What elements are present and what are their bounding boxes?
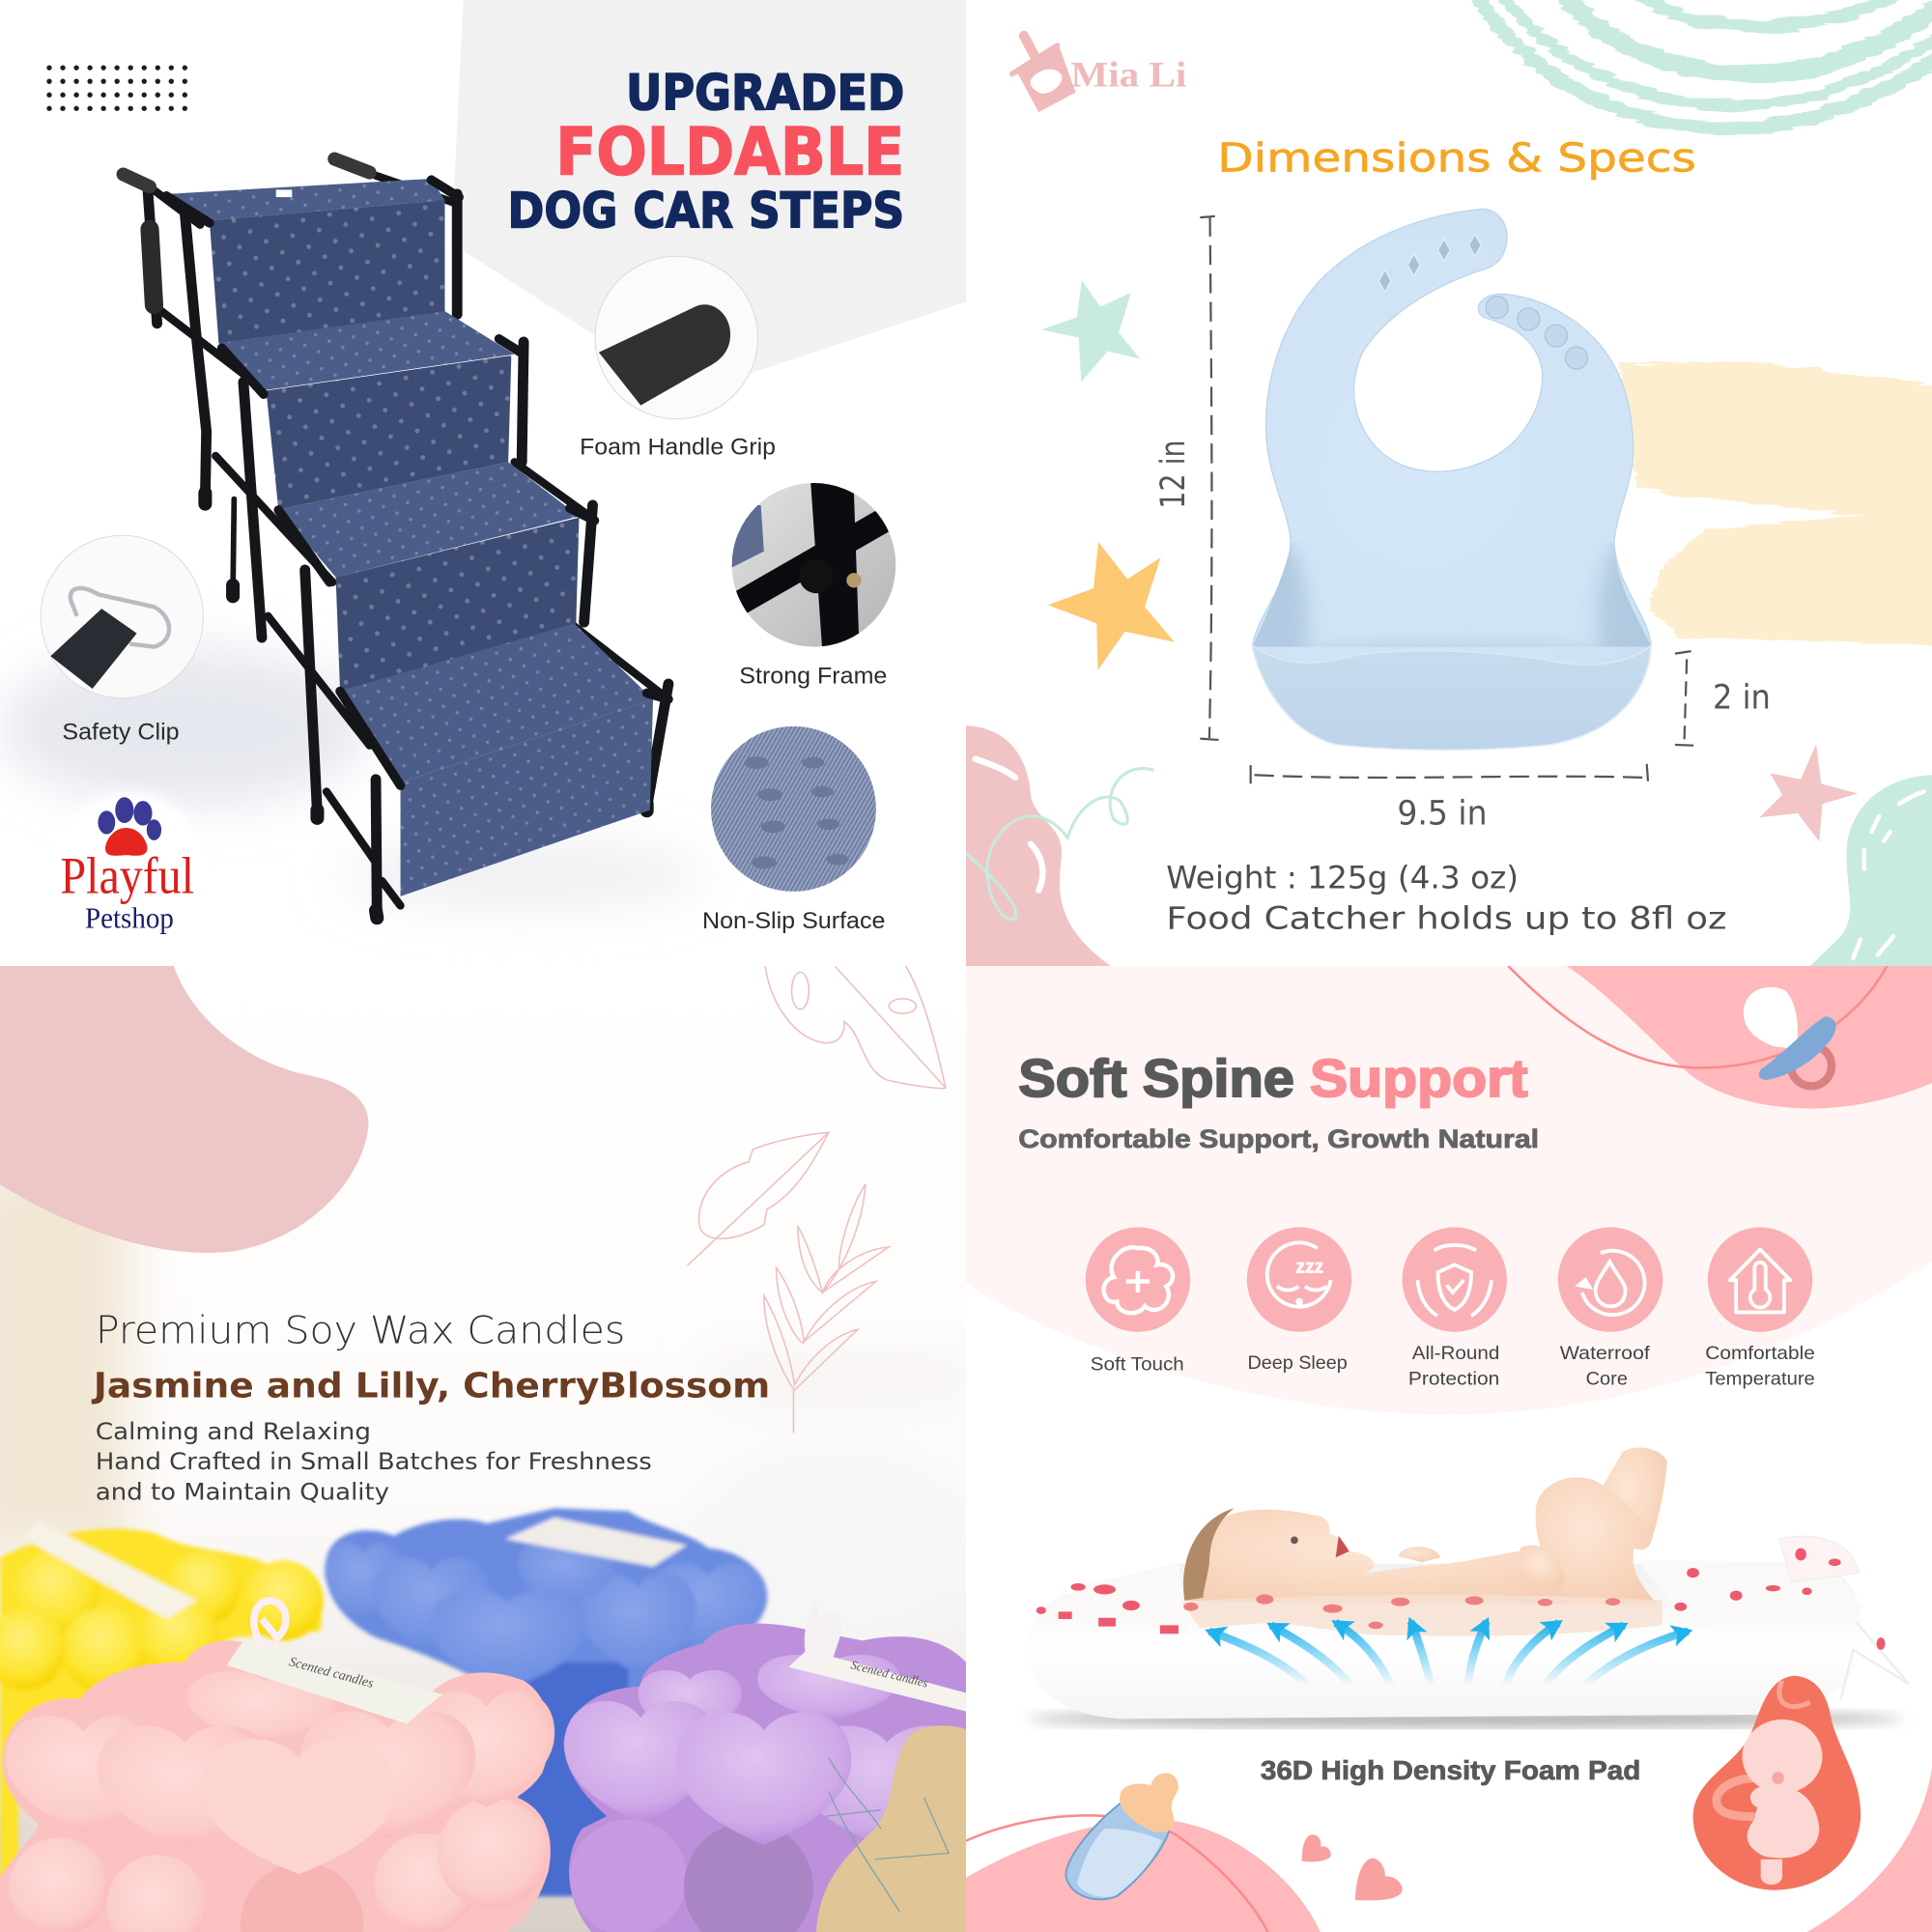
star: mint (1041, 280, 1140, 382)
title: FOLDABLE (555, 113, 904, 189)
panel: dog car steps (0, 0, 966, 934)
description text: Hand Crafted in Small Batches for Freshness (96, 1448, 652, 1475)
pink corner bottom right (1807, 1767, 1932, 1932)
floor shadow (0, 647, 708, 906)
curved line (1508, 966, 1887, 1067)
callout: non-slip surface (702, 726, 885, 934)
feature: all-round protection: All-Round (1412, 1344, 1499, 1364)
baby (1184, 1447, 1667, 1605)
dimension labels: 12 in (1154, 440, 1193, 509)
icon: baby bottle (1065, 1773, 1179, 1899)
blurred background tones (0, 1169, 985, 1656)
title: UPGRADED (626, 66, 904, 123)
candle: pink: Scented candles (287, 1654, 376, 1691)
cream brush stroke (1619, 362, 1932, 643)
sheer fabric (1181, 1595, 1662, 1636)
dimension lines (1200, 216, 1693, 783)
mint brush strokes (1475, 0, 1932, 128)
pale pink backdrop (966, 966, 1932, 1414)
feature: soft touch (1086, 1227, 1190, 1375)
icon: fetus in womb (1693, 1676, 1861, 1890)
heading: Soft Spine (1018, 1048, 1294, 1108)
title: DOG CAR STEPS (508, 183, 904, 240)
logo: playful petshop (52, 792, 207, 946)
subheading: Comfortable Support, Growth Natural (1018, 1124, 1539, 1153)
heading (1018, 1048, 1528, 1108)
feature: all-round protection: Protection (1408, 1370, 1499, 1390)
callout: safety clip (41, 535, 203, 745)
pink blob (966, 725, 1111, 966)
panel: bib dimensions and specs (966, 0, 1932, 966)
weight and capacity specs: Weight : 125g (4.3 oz) (1166, 860, 1519, 896)
feature: waterproof core: Waterroof (1560, 1344, 1651, 1364)
logo: playful petshop: Petshop (85, 901, 174, 934)
callout: strong frame: Strong Frame (739, 663, 887, 689)
title (508, 66, 904, 240)
feature: comfortable temperature: Comfortable (1705, 1344, 1815, 1364)
curved line bottom (966, 1815, 1267, 1932)
candle: purple: Scented candles (849, 1658, 929, 1690)
panel: soft spine support (966, 966, 1932, 1932)
weight and capacity specs (1166, 860, 1727, 937)
icon: pacifier (1744, 987, 1835, 1086)
feature: comfortable temperature (1705, 1227, 1815, 1390)
callout: foam handle grip (580, 256, 776, 461)
pink corner top right (1567, 966, 1932, 1108)
weight and capacity specs: Food Catcher holds up to 8fl oz (1166, 900, 1727, 937)
panel: soy wax candles (0, 966, 966, 1932)
mint swirl (966, 769, 1154, 920)
description text: Calming and Relaxing (96, 1418, 371, 1445)
logo: mia li: Mia Li (1070, 54, 1186, 94)
support arrows (1209, 1622, 1688, 1686)
logo: mia li (1012, 36, 1186, 112)
dimension labels: 2 in (1713, 678, 1771, 717)
heading: premium soy wax candles: Premium Soy Wax Candles (96, 1308, 625, 1352)
dimension labels (1154, 440, 1771, 833)
feature: comfortable temperature: Temperature (1705, 1370, 1815, 1390)
strap holes (1378, 234, 1481, 292)
pink blob (0, 966, 368, 1253)
description text (96, 1418, 652, 1505)
description text: and to Maintain Quality (96, 1478, 389, 1505)
subheading: scent names: Jasmine and Lilly, CherryBlossom (92, 1366, 770, 1406)
bib (1240, 209, 1665, 750)
logo: playful petshop: Playful (60, 847, 194, 905)
leaf outlines (688, 966, 946, 1433)
pink hill bottom left (966, 1820, 1321, 1932)
tan blob (816, 1725, 966, 1932)
callout: non-slip surface: Non-Slip Surface (702, 908, 885, 934)
grey background wedge (451, 0, 966, 394)
star: pink (1759, 744, 1858, 841)
callout: foam handle grip: Foam Handle Grip (580, 435, 776, 461)
callout: strong frame (727, 474, 899, 689)
candle: yellow (0, 1520, 324, 1932)
callout: safety clip: Safety Clip (62, 719, 180, 745)
feature: soft touch: Soft Touch (1091, 1354, 1184, 1375)
foldable steps product (124, 159, 668, 918)
mint blob (1810, 775, 1932, 966)
feature: deep sleep (1247, 1227, 1351, 1374)
feature: deep sleep: zzz (1296, 1258, 1323, 1278)
star: orange (1048, 542, 1175, 670)
heading: dimensions and specs: Dimensions & Specs (1217, 134, 1696, 181)
candle: pink (0, 1601, 554, 1932)
feature: deep sleep: Deep Sleep (1247, 1353, 1348, 1374)
candle: blue (325, 1508, 767, 1896)
snap buttons (1486, 297, 1587, 369)
baby lounger with support arrows (1028, 1447, 1909, 1727)
feature: waterproof core: Core (1586, 1370, 1628, 1390)
candle: purple (564, 1604, 978, 1932)
feature: waterproof core (1558, 1227, 1662, 1390)
caption: foam pad: 36D High Density Foam Pad (1261, 1755, 1640, 1785)
icon: hearts (1302, 1834, 1403, 1900)
dot grid decoration (46, 65, 187, 111)
heading: Support (1310, 1048, 1528, 1108)
dimension labels: 9.5 in (1397, 794, 1488, 833)
feature: all-round protection (1403, 1227, 1507, 1390)
